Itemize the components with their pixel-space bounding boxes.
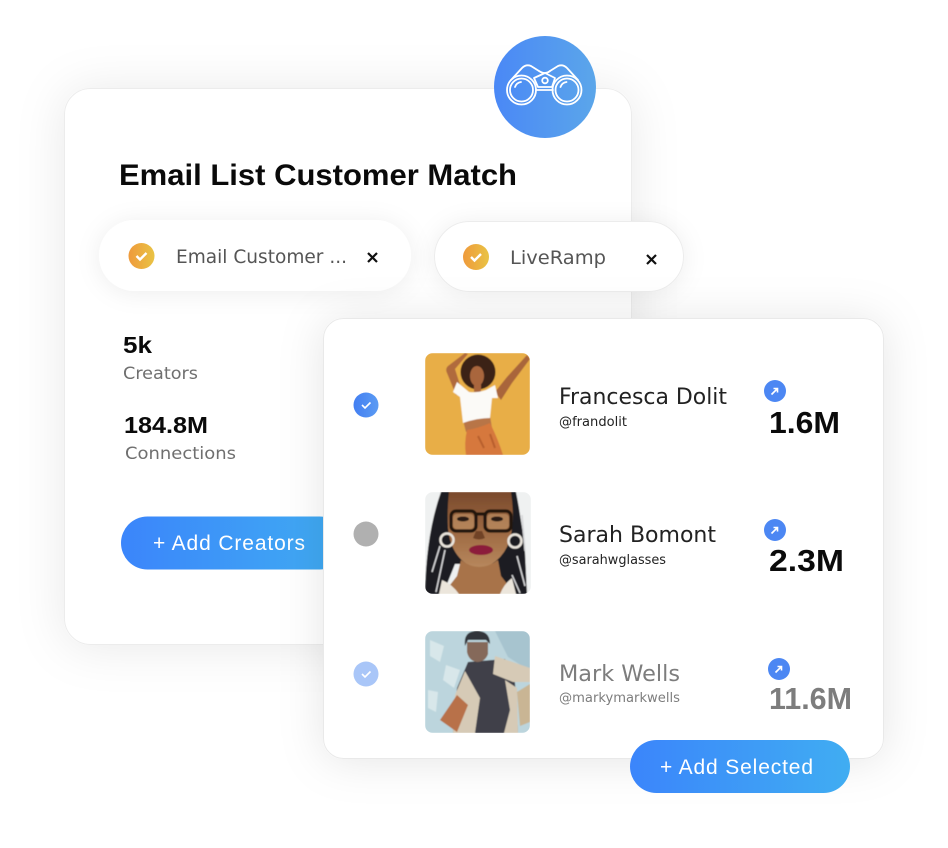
- name: Mark Wells: [559, 662, 680, 687]
- row: mark wells: [354, 631, 852, 733]
- name: Sarah Bomont: [559, 523, 716, 548]
- button: add selected: [630, 740, 850, 793]
- handle: @sarahwglasses: [559, 553, 666, 568]
- chip label: LiveRamp: [510, 247, 606, 269]
- icon: orange check: [463, 244, 489, 270]
- heading: card title: Email List Customer Match: [119, 159, 517, 192]
- icon: close: [647, 255, 656, 264]
- chip: liveramp filter: [434, 221, 684, 292]
- handle: @frandolit: [559, 415, 627, 430]
- row: sarah bomont: [354, 492, 844, 594]
- stat: connections: [124, 412, 236, 464]
- row: francesca dolit: [354, 353, 840, 455]
- stat: connections: Connections: [125, 444, 236, 464]
- handle: @markymarkwells: [559, 691, 680, 706]
- name: Francesca Dolit: [559, 385, 727, 410]
- button: add creators: [121, 516, 346, 570]
- panel: creators list card: [323, 318, 884, 759]
- metric: 1.6M: [769, 405, 840, 440]
- icon: selected checkbox: [354, 392, 378, 418]
- stat: creators: [123, 332, 198, 384]
- icon: binoculars badge: [494, 36, 596, 138]
- icon: orange check: [128, 243, 154, 269]
- metric: 11.6M: [769, 681, 852, 716]
- photo: sarah: [425, 492, 531, 594]
- button: add selected: + Add Selected: [660, 756, 813, 779]
- icon: faded selected checkbox: [354, 662, 378, 686]
- stat: connections: 184.8M: [124, 412, 208, 438]
- metric: 2.3M: [769, 543, 844, 578]
- icon: trend arrow: [764, 380, 786, 402]
- icon: unselected checkbox: [354, 522, 378, 546]
- icon: close: [368, 253, 377, 262]
- chip label: Email Customer ...: [176, 246, 347, 268]
- photo: mark: [425, 631, 530, 733]
- button: add creators: + Add Creators: [153, 532, 305, 555]
- chip: email customer filter: [99, 220, 411, 291]
- icon: trend arrow: [764, 519, 786, 541]
- stat: creators: 5k: [123, 332, 152, 358]
- photo: francesca: [425, 353, 530, 455]
- icon: trend arrow: [768, 658, 790, 680]
- stat: creators: Creators: [123, 364, 198, 384]
